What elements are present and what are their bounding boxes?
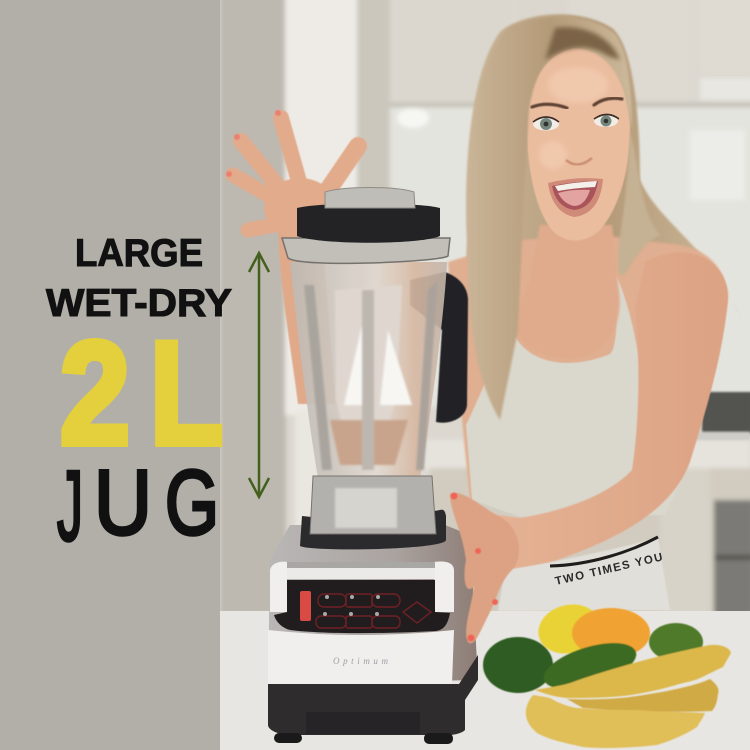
front hand	[450, 492, 519, 643]
heading: large wet-dry: LARGE	[75, 232, 203, 275]
blender	[268, 188, 478, 744]
panel buttons	[316, 594, 431, 628]
white front	[268, 561, 454, 684]
counter	[220, 611, 750, 750]
torso and far shoulder	[448, 235, 727, 520]
banana top	[535, 645, 731, 698]
hair back	[466, 14, 742, 425]
jug label: U	[94, 452, 152, 554]
fruits	[483, 598, 731, 748]
raised hand	[226, 110, 358, 404]
fingertips	[226, 110, 281, 177]
fingers	[233, 118, 358, 230]
lime right	[649, 623, 703, 661]
heading: large wet-dry	[46, 232, 232, 325]
jug rim	[282, 238, 450, 263]
jug lid	[297, 204, 440, 243]
brand: Optimum	[333, 656, 388, 666]
orange	[572, 608, 650, 658]
leggings	[498, 538, 670, 611]
banana middle	[567, 679, 719, 712]
arrow: jug height	[249, 253, 269, 497]
nail polish	[450, 492, 498, 642]
kitchen background	[220, 0, 750, 615]
2L capacity: L	[150, 312, 223, 474]
palm	[264, 178, 336, 238]
brows	[532, 98, 622, 108]
neck	[512, 225, 620, 358]
hair parting shadow	[545, 27, 620, 60]
left panel	[0, 0, 220, 750]
heading: large wet-dry: WET-DRY	[46, 282, 232, 325]
stove	[695, 392, 750, 440]
waistband text: TWO TIMES YOU	[554, 551, 665, 588]
forearm	[278, 215, 336, 404]
arm	[460, 252, 728, 572]
control panel	[274, 580, 450, 633]
jug label: J	[57, 450, 83, 561]
jug label	[57, 450, 219, 561]
lid cap	[325, 188, 415, 208]
face	[527, 47, 630, 240]
waistband line	[550, 537, 658, 566]
eyes	[533, 114, 619, 130]
dark base	[268, 655, 478, 735]
hair front	[468, 17, 632, 420]
mouth	[548, 178, 603, 217]
jug label: G	[165, 452, 219, 554]
collar	[300, 510, 446, 549]
jug body	[290, 262, 447, 478]
tank top	[466, 275, 684, 517]
woman	[226, 14, 742, 611]
2L capacity	[60, 312, 223, 474]
cheek glow	[539, 67, 608, 169]
jug base	[310, 476, 436, 534]
2L capacity: 2	[60, 312, 130, 474]
avocado left	[483, 637, 553, 693]
motor housing	[268, 525, 478, 684]
jug handle	[410, 272, 468, 423]
power switch	[300, 591, 311, 621]
avocado middle	[539, 634, 641, 698]
lemon	[533, 598, 605, 660]
feet	[274, 733, 453, 744]
banana bottom	[526, 695, 705, 748]
nose	[566, 158, 592, 165]
